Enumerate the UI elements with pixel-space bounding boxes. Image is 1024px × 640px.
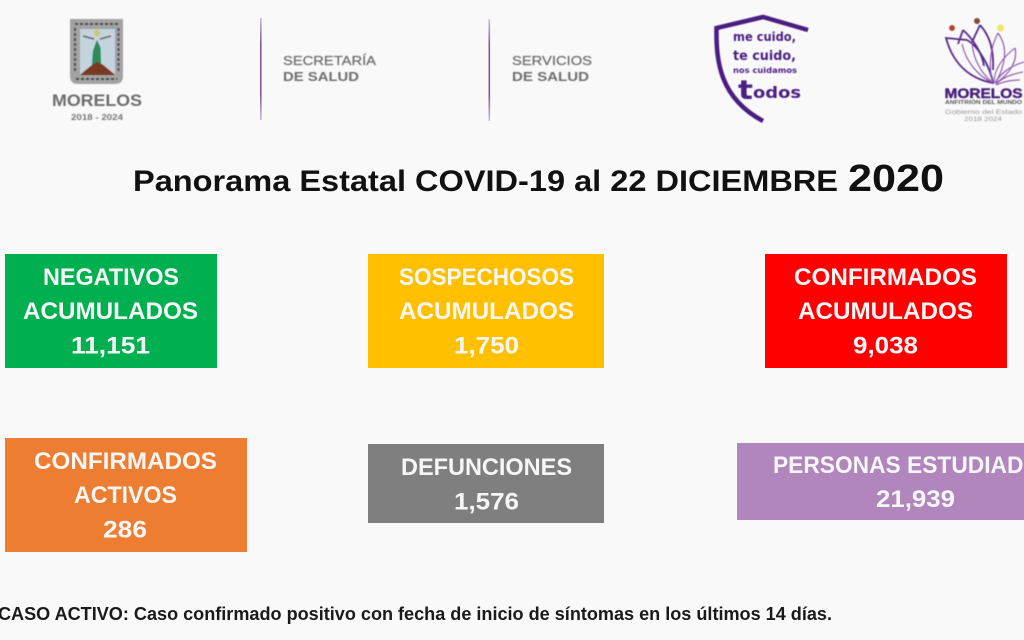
logo: Servicios de Salud: DE SALUD — [512, 69, 589, 84]
logo: Morelos lotus: ANFITRIÓN DEL MUNDO — [945, 98, 1022, 106]
panel: confirmados activos: ACTIVOS — [74, 482, 177, 509]
panel: negativos acumulados: 11,151 — [71, 332, 150, 360]
logo: me cuido shield: me cuido, — [733, 30, 796, 44]
logo: me cuido shield: te cuido, — [733, 49, 796, 64]
logo: me cuido shield: nos cuidamos — [733, 66, 797, 75]
logo: Servicios de Salud: SERVICIOS — [512, 53, 592, 68]
divider: purple line 1 — [260, 18, 262, 120]
panel: sospechosos acumulados: 1,750 — [454, 332, 519, 360]
logo: me cuido shield: t — [738, 75, 753, 106]
logo: Morelos lotus: MORELOS — [944, 85, 1022, 101]
panel: negativos acumulados: ACUMULADOS — [23, 298, 198, 325]
panel: confirmados acumulados: ACUMULADOS — [798, 298, 973, 325]
logo: Morelos lotus — [944, 18, 1024, 123]
panel: confirmados activos — [5, 438, 247, 552]
panel: sospechosos acumulados: ACUMULADOS — [399, 298, 574, 325]
panel: sospechosos acumulados: SOSPECHOSOS — [399, 264, 574, 291]
logo: Servicios de Salud — [512, 53, 592, 84]
panel: defunciones — [368, 444, 604, 523]
logo: Morelos wordmark: MORELOS — [52, 91, 142, 110]
panel: defunciones: DEFUNCIONES — [401, 454, 572, 481]
logo: me cuido shield — [716, 17, 808, 121]
panel: confirmados activos: 286 — [103, 516, 147, 544]
logo: Morelos wordmark — [52, 91, 142, 122]
panel: confirmados acumulados: CONFIRMADOS — [794, 264, 977, 291]
logo: Morelos lotus: 2018 2024 — [964, 117, 1003, 123]
logo: Secretaría de Salud: DE SALUD — [283, 69, 359, 84]
logo: me cuido shield: odos — [753, 83, 801, 102]
panel: defunciones: 1,576 — [454, 488, 519, 516]
panel: negativos acumulados: NEGATIVOS — [43, 264, 179, 291]
title: 2020 — [848, 158, 944, 200]
logo: Secretaría de Salud — [283, 53, 376, 84]
logo: Morelos lotus: Gobierno del Estado — [945, 110, 1023, 116]
panel: confirmados acumulados: 9,038 — [853, 332, 918, 360]
footnote: CASO ACTIVO: Caso confirmado positivo con fecha de inicio de síntomas en los últimos 14 días. — [0, 604, 832, 624]
title — [133, 158, 944, 200]
panel: personas estudiadas: 21,939 — [876, 486, 955, 513]
panel: sospechosos acumulados — [368, 254, 604, 368]
title: Panorama Estatal COVID-19 al 22 DICIEMBRE — [133, 165, 838, 198]
panel: confirmados activos: CONFIRMADOS — [34, 448, 217, 475]
logo: Morelos wordmark: 2018 - 2024 — [71, 113, 124, 122]
divider: purple line 2 — [488, 19, 490, 121]
logo: Morelos coat of arms — [70, 19, 123, 84]
panel: personas estudiadas — [737, 443, 1024, 520]
panel: confirmados acumulados — [765, 254, 1007, 368]
logo: Secretaría de Salud: SECRETARÍA — [283, 53, 376, 68]
panel: negativos acumulados — [5, 254, 217, 368]
